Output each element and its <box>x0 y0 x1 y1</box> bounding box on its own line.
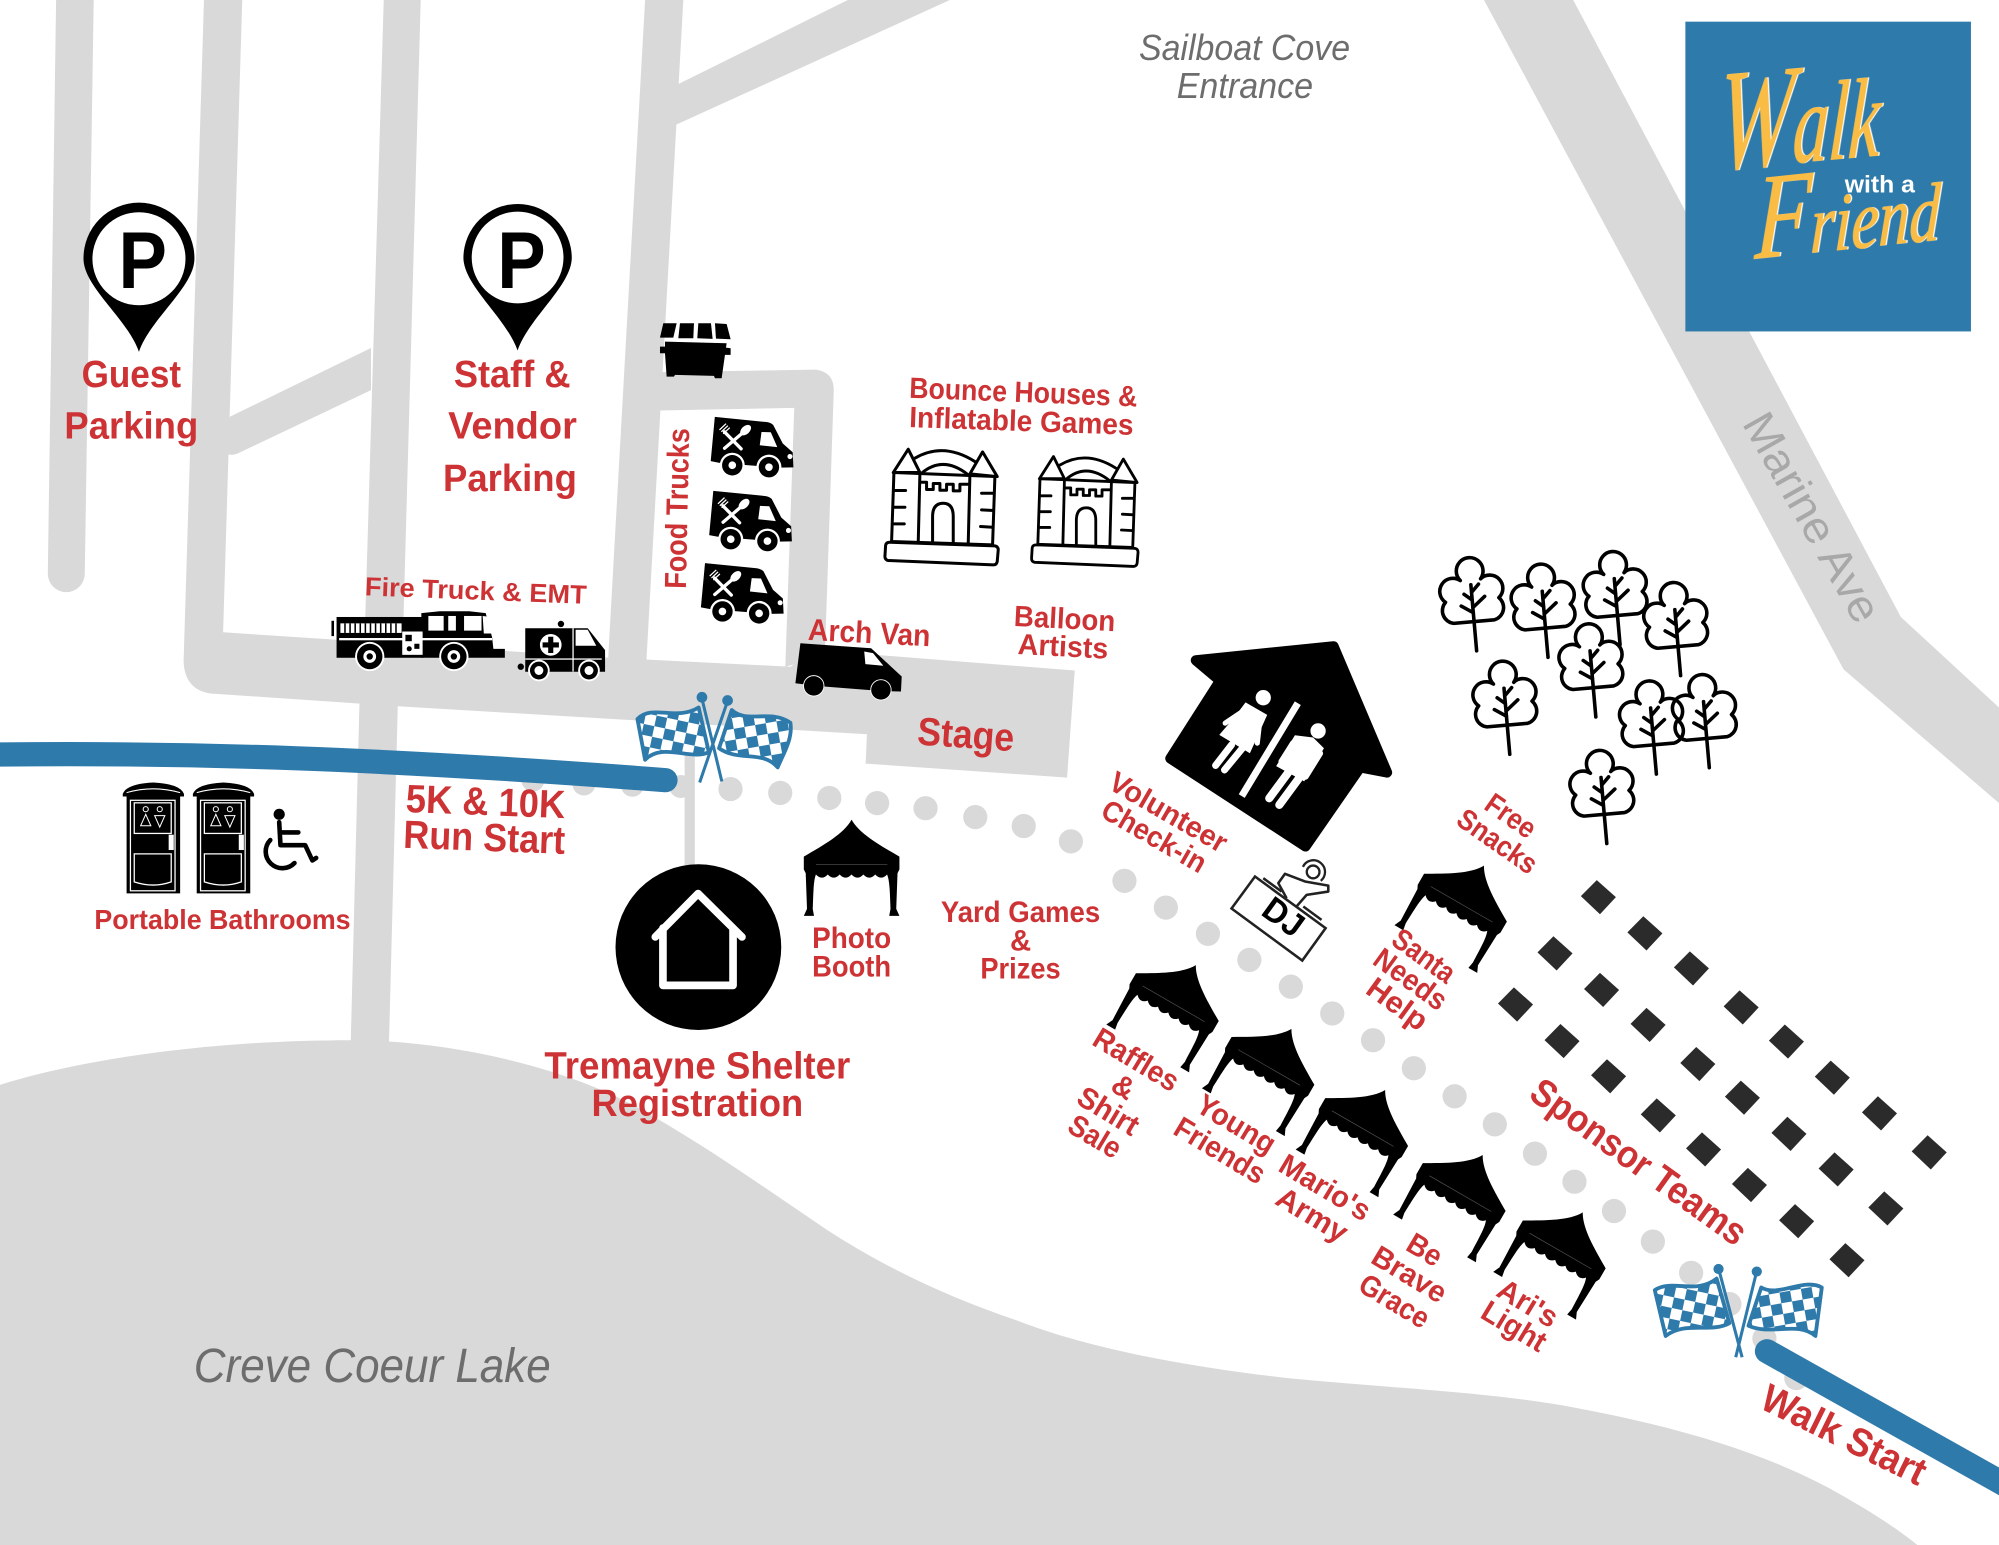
icon: portable toilet 2 <box>193 782 254 893</box>
icon: wheelchair accessible <box>266 809 316 868</box>
label: Walk Start: Walk Start <box>1754 1376 1934 1494</box>
icon: Raffles tent <box>1106 941 1237 1072</box>
label: Balloon Artists <box>1013 600 1116 666</box>
icon: guest parking pin: P <box>119 216 167 306</box>
label: Balloon Artists: Balloon <box>1013 600 1116 638</box>
icon: EMT ambulance <box>518 621 605 681</box>
label: Photo Booth: Booth <box>812 950 891 983</box>
walking path dots <box>521 769 1808 1390</box>
label: Ari's Light: Light <box>1475 1295 1552 1359</box>
icon: arch van <box>795 643 902 700</box>
icon: bounce castle 1 <box>885 449 998 565</box>
icon: start flags at walk start <box>1655 1264 1822 1357</box>
label: Be Brave Grace <box>1353 1227 1453 1335</box>
icon: guest parking pin <box>84 203 194 352</box>
label: Be Brave Grace: Brave <box>1366 1240 1453 1310</box>
label: Guest Parking: Guest <box>82 353 181 396</box>
label: Arch Van: Arch Van <box>807 613 931 653</box>
label: Ari's Light <box>1475 1273 1564 1359</box>
label: Volunteer Check-in: Volunteer <box>1103 765 1233 860</box>
label: Portable Bathrooms: Portable Bathrooms <box>94 904 351 935</box>
logo panel <box>1685 22 1971 331</box>
label: Raffles and Shirt Sale: Raffles <box>1087 1022 1185 1099</box>
label: Be Brave Grace: Be <box>1401 1227 1448 1274</box>
label: Tremayne Shelter Registration: Registration <box>592 1082 803 1125</box>
blue route: 5K and 10K run <box>0 754 665 780</box>
label: Staff and Vendor Parking: Vendor <box>448 405 577 448</box>
label: Sailboat Cove Entrance: Entrance <box>1177 66 1313 106</box>
label: Sailboat Cove Entrance <box>1139 28 1350 106</box>
icon: bounce castle 2 <box>1032 457 1138 566</box>
label: Young Friends: Friends <box>1168 1111 1271 1191</box>
label: Bounce Houses and Inflatable Games: Inflatable Games <box>909 401 1134 442</box>
label: 5K and 10K Run Start: 5K & 10K <box>405 777 566 827</box>
label: Food Trucks: Food Trucks <box>659 428 696 589</box>
label: Yard Games and Prizes: & <box>1010 924 1031 957</box>
logo word: Friend: Friend <box>1753 132 1944 286</box>
label: Santa Needs Help: Help <box>1360 971 1434 1038</box>
label: Bounce Houses and Inflatable Games: Bounce Houses & <box>909 372 1138 413</box>
label: Photo Booth <box>812 922 891 983</box>
label: Young Friends: Young <box>1190 1088 1282 1161</box>
label: Volunteer Check-in: Check-in <box>1095 793 1212 880</box>
icon: food stand <box>660 323 731 378</box>
label: Tremayne Shelter Registration <box>544 1044 850 1125</box>
label: Mario's Army: Army <box>1270 1181 1354 1250</box>
label: Free Snacks: Free <box>1479 787 1542 845</box>
icon: staff parking pin: P <box>497 216 546 306</box>
label: Marine Ave: Marine Ave <box>1733 404 1890 631</box>
icon: Be Brave Grace tent <box>1393 1131 1524 1262</box>
trees <box>1437 549 1741 846</box>
label: Staff and Vendor Parking: Parking <box>443 457 577 500</box>
divider bar <box>1242 703 1298 796</box>
figure: man <box>1269 723 1326 805</box>
icon: DJ booth <box>1232 860 1328 961</box>
logo words: with a: with a <box>1844 171 1915 198</box>
label: Yard Games and Prizes: Yard Games <box>941 896 1100 929</box>
label: Raffles and Shirt Sale: Sale <box>1062 1108 1127 1166</box>
label: Sponsor Teams: Sponsor Teams <box>1522 1070 1755 1254</box>
label: Tremayne Shelter Registration: Tremayne Shelter <box>544 1044 850 1087</box>
logo word: Walk: Walk <box>1714 28 1886 202</box>
label: Yard Games and Prizes <box>941 896 1100 986</box>
icon: food truck 2 <box>709 491 794 554</box>
label: Ari's Light: Ari's <box>1491 1273 1564 1335</box>
label: Free Snacks: Snacks <box>1451 802 1544 881</box>
icon: Mario's Army tent <box>1296 1066 1427 1197</box>
label: Staff and Vendor Parking <box>443 353 577 500</box>
icon: DJ booth: DJ <box>1255 890 1311 945</box>
label: Mario's Army: Mario's <box>1273 1148 1377 1228</box>
icon: start flags at run start <box>637 692 791 782</box>
icon: Ari's Light tent <box>1493 1189 1624 1320</box>
Creve Coeur Lake <box>0 1040 1917 1545</box>
icon: Young Friends tent <box>1202 1005 1333 1136</box>
icon: Tremayne Shelter <box>616 864 781 1030</box>
sponsor team markers <box>1498 880 1947 1277</box>
label: 5K and 10K Run Start: Run Start <box>403 813 566 863</box>
label: Santa Needs Help <box>1360 922 1462 1038</box>
label: Balloon Artists: Artists <box>1017 628 1109 666</box>
label: Staff and Vendor Parking: Staff & <box>454 353 571 396</box>
icon: food truck 3 <box>700 563 785 627</box>
roads <box>48 0 1999 1048</box>
icon: food truck 1 <box>710 417 795 481</box>
figure: woman <box>1216 690 1271 770</box>
label: Photo Booth: Photo <box>812 922 891 955</box>
label: Stage: Stage <box>916 710 1016 760</box>
label: Raffles and Shirt Sale <box>1062 1022 1185 1166</box>
icon: portable toilet 1 <box>123 782 184 893</box>
label: Guest Parking: Parking <box>64 405 198 448</box>
label: Creve Coeur Lake: Creve Coeur Lake <box>194 1339 551 1393</box>
label: Santa Needs Help: Needs <box>1367 942 1453 1017</box>
label: Santa Needs Help: Santa <box>1385 922 1462 990</box>
label: Bounce Houses and Inflatable Games <box>909 372 1138 442</box>
label: Fire Truck and EMT: Fire Truck & EMT <box>364 571 587 610</box>
icon: photo booth tent <box>804 820 899 916</box>
label: Guest Parking <box>64 353 198 448</box>
blue route: walk <box>1767 1351 1999 1504</box>
label: Yard Games and Prizes: Prizes <box>980 953 1061 986</box>
label: Be Brave Grace: Grace <box>1353 1268 1435 1335</box>
icon: Santa Needs Help tent <box>1394 842 1525 973</box>
label: Sailboat Cove Entrance: Sailboat Cove <box>1139 28 1350 68</box>
icon: staff parking pin <box>463 204 572 351</box>
icon: fire truck <box>331 611 505 671</box>
icon: restrooms house <box>1170 646 1387 846</box>
label: 5K and 10K Run Start <box>403 777 566 863</box>
label: Raffles and Shirt Sale: Shirt <box>1071 1080 1145 1143</box>
label: Raffles and Shirt Sale: & <box>1106 1068 1141 1107</box>
